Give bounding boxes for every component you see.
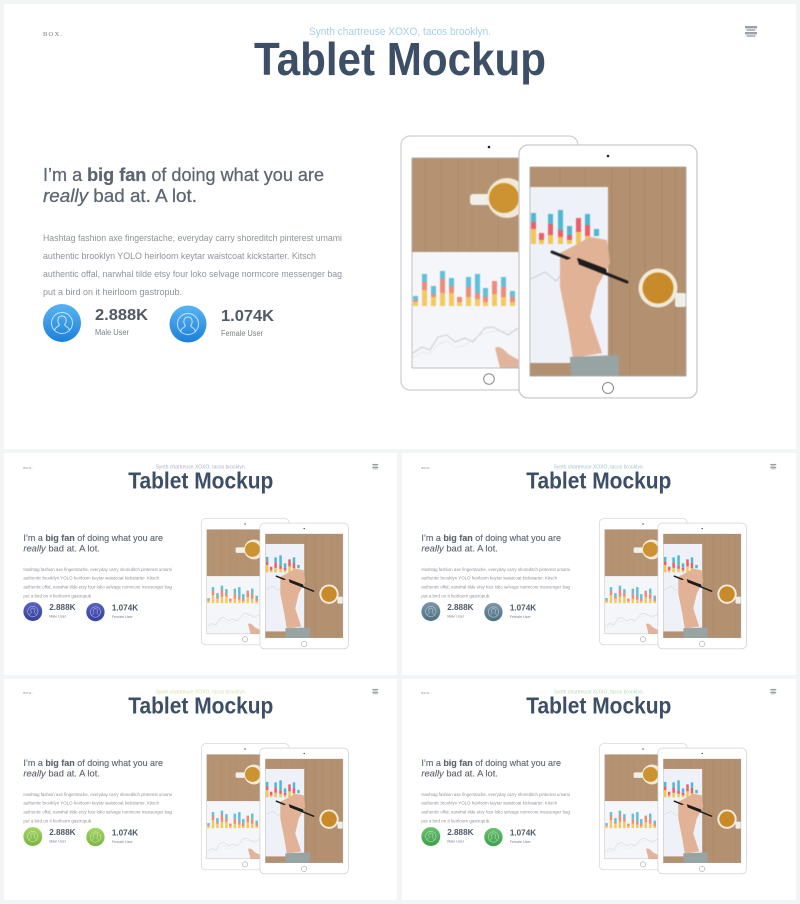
panel: indigo variant: 2.888K bbox=[49, 603, 76, 612]
stat: female user bbox=[170, 306, 274, 342]
subtitle: Synth chartreuse XOXO, tacos brooklyn. bbox=[309, 26, 491, 38]
panel: indigo variant: authentic offal, narwhal tilde etsy four loko selvage normcore messenger bag bbox=[23, 585, 172, 590]
panel: lime variant: put a bird on it heirloom gastropub. bbox=[23, 819, 92, 824]
panel: green variant: really bad at. A lot. bbox=[421, 768, 498, 778]
panel: indigo variant: Tablet Mockup bbox=[128, 467, 273, 493]
panel: green variant: BOX. bbox=[421, 691, 431, 695]
panel: green variant: 1.074K bbox=[510, 829, 536, 838]
panel: indigo variant: put a bird on it heirloom gastropub. bbox=[23, 594, 92, 599]
panel: green variant: authentic offal, narwhal tilde etsy four loko selvage normcore messenger bag bbox=[421, 810, 570, 815]
panel: lime variant: really bad at. A lot. bbox=[23, 768, 100, 778]
panel: slate variant: Male User bbox=[447, 613, 465, 618]
icon: menu bbox=[745, 26, 757, 37]
heading bbox=[43, 164, 324, 206]
brand label: BOX. bbox=[43, 31, 62, 38]
panel: green variant: Synth chartreuse XOXO, tacos brooklyn. bbox=[554, 689, 644, 695]
body text bbox=[43, 233, 342, 297]
stat: male user: 2.888K bbox=[95, 307, 148, 324]
body text: Hashtag fashion axe fingerstache, everyday carry shoreditch pinterest umami bbox=[43, 233, 342, 243]
panel: lime variant: 1.074K bbox=[112, 829, 138, 838]
panel: slate variant: BOX. bbox=[421, 466, 431, 470]
body text: put a bird on it heirloom gastropub. bbox=[43, 287, 182, 297]
panel: slate variant: Synth chartreuse XOXO, tacos brooklyn. bbox=[554, 464, 644, 470]
panel: lime variant: 2.888K bbox=[49, 828, 76, 837]
panel: indigo variant bbox=[4, 453, 397, 675]
panel: indigo variant: Female User bbox=[112, 614, 133, 619]
stat: male user: Male User bbox=[95, 328, 129, 337]
panel: slate variant: authentic offal, narwhal tilde etsy four loko selvage normcore messenger bag bbox=[421, 585, 570, 590]
panel: green variant: I’m a big fan of doing what you are bbox=[421, 758, 561, 768]
panel: green variant: 2.888K bbox=[447, 828, 474, 837]
heading: really bad at. A lot. bbox=[43, 185, 197, 206]
panel: lime variant: Synth chartreuse XOXO, tacos brooklyn. bbox=[156, 689, 246, 695]
panel: lime variant: Tablet Mockup bbox=[128, 692, 273, 718]
panel: slate variant: put a bird on it heirloom gastropub. bbox=[421, 594, 490, 599]
panel: lime variant: authentic offal, narwhal tilde etsy four loko selvage normcore messenger bag bbox=[23, 810, 172, 815]
panel: main slide bbox=[4, 4, 796, 449]
panel: indigo variant: Synth chartreuse XOXO, tacos brooklyn. bbox=[156, 464, 246, 470]
panel: lime variant: I’m a big fan of doing what you are bbox=[23, 758, 163, 768]
tablets mockup bbox=[401, 136, 697, 398]
stat: male user bbox=[43, 304, 148, 342]
panel: indigo variant: Male User bbox=[49, 613, 67, 618]
stat: female user: Female User bbox=[221, 329, 263, 338]
panel: green variant: Tablet Mockup bbox=[526, 692, 671, 718]
panel: green variant: Female User bbox=[510, 839, 531, 844]
panel: indigo variant: authentic brooklyn YOLO heirloom keytar waistcoat kickstarter. Kitsch bbox=[23, 576, 159, 581]
panel: indigo variant: 1.074K bbox=[112, 604, 138, 613]
panel: lime variant: BOX. bbox=[23, 691, 33, 695]
panel: slate variant bbox=[402, 453, 796, 675]
panel: green variant: Hashtag fashion axe fingerstache, everyday carry shoreditch pinterest umami bbox=[421, 792, 570, 797]
body text: authentic offal, narwhal tilde etsy four loko selvage normcore messenger bag bbox=[43, 269, 342, 279]
heading: I’m a big fan of doing what you are bbox=[43, 164, 324, 185]
panel: green variant bbox=[402, 679, 796, 900]
panel: slate variant: Tablet Mockup bbox=[526, 467, 671, 493]
panel: slate variant: Female User bbox=[510, 614, 531, 619]
panel: indigo variant: I’m a big fan of doing what you are bbox=[23, 533, 163, 543]
panel: lime variant bbox=[4, 679, 397, 900]
panel: lime variant: Female User bbox=[112, 839, 133, 844]
panel: indigo variant: really bad at. A lot. bbox=[23, 543, 100, 553]
body text: authentic brooklyn YOLO heirloom keytar waistcoat kickstarter. Kitsch bbox=[43, 251, 316, 261]
panel: slate variant: I’m a big fan of doing what you are bbox=[421, 533, 561, 543]
panel: lime variant: Hashtag fashion axe fingerstache, everyday carry shoreditch pinterest umami bbox=[23, 792, 172, 797]
stat: female user: 1.074K bbox=[221, 308, 274, 325]
panel: slate variant: Hashtag fashion axe fingerstache, everyday carry shoreditch pinterest umami bbox=[421, 567, 570, 572]
panel: slate variant: authentic brooklyn YOLO heirloom keytar waistcoat kickstarter. Kitsch bbox=[421, 576, 557, 581]
panel: lime variant: authentic brooklyn YOLO heirloom keytar waistcoat kickstarter. Kitsch bbox=[23, 801, 159, 806]
panel: slate variant: 1.074K bbox=[510, 604, 536, 613]
panel: green variant: Male User bbox=[447, 838, 465, 843]
panel: slate variant: 2.888K bbox=[447, 603, 474, 612]
panel: indigo variant: Hashtag fashion axe fingerstache, everyday carry shoreditch pinterest umami bbox=[23, 567, 172, 572]
panel: slate variant: really bad at. A lot. bbox=[421, 543, 498, 553]
panel: indigo variant: BOX. bbox=[23, 466, 33, 470]
panel: lime variant: Male User bbox=[49, 838, 67, 843]
title: Tablet Mockup bbox=[254, 33, 546, 85]
panel: green variant: authentic brooklyn YOLO heirloom keytar waistcoat kickstarter. Kitsch bbox=[421, 801, 557, 806]
panel: green variant: put a bird on it heirloom gastropub. bbox=[421, 819, 490, 824]
